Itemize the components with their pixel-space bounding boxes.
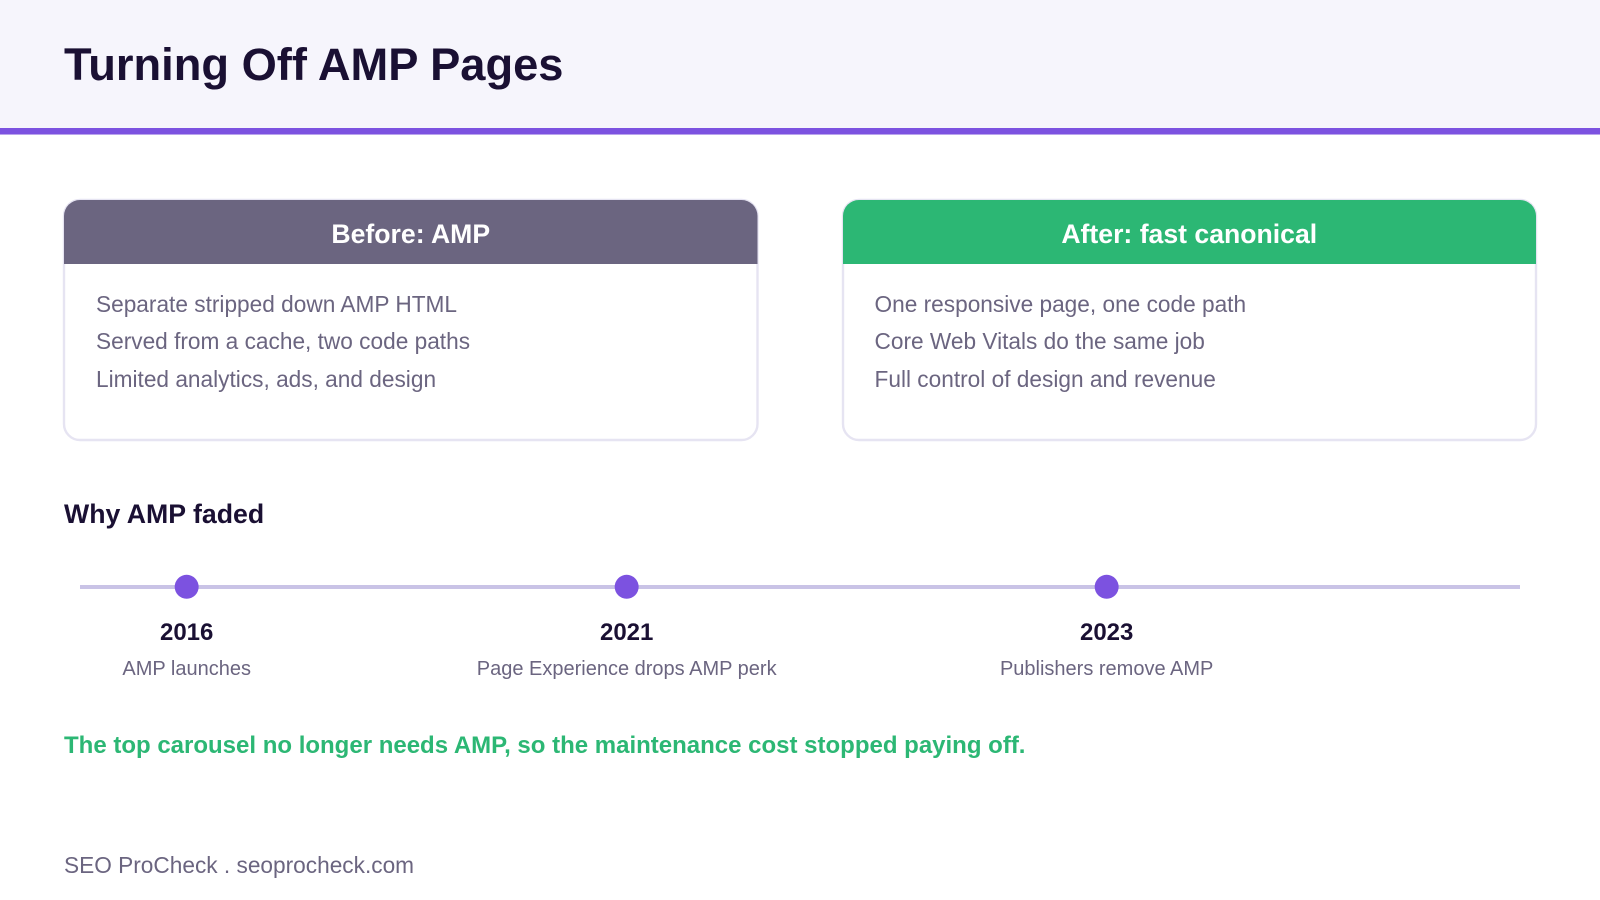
header band bbox=[0, 0, 1600, 135]
panel heading: before: Before: AMP bbox=[331, 219, 490, 249]
milestone: 2021: Page Experience drops AMP perk bbox=[477, 658, 777, 680]
section heading: Why AMP faded bbox=[64, 499, 264, 529]
list: after points: Core Web Vitals do the same job bbox=[874, 328, 1205, 354]
list: after points: Full control of design and revenue bbox=[874, 366, 1216, 392]
timeline bbox=[80, 574, 1520, 680]
list: after points bbox=[874, 291, 1246, 392]
milestone: 2016: 2016 bbox=[160, 619, 213, 646]
list: after points: One responsive page, one code path bbox=[874, 291, 1246, 317]
list: before points: Served from a cache, two code paths bbox=[96, 328, 470, 354]
list: before points bbox=[96, 291, 470, 392]
footer: SEO ProCheck . seoprocheck.com bbox=[64, 852, 414, 878]
list: before points: Separate stripped down AMP HTML bbox=[96, 291, 457, 317]
title: Turning Off AMP Pages bbox=[64, 39, 563, 90]
milestone: 2021: 2021 bbox=[600, 619, 653, 646]
panel: after fast canonical bbox=[842, 198, 1538, 442]
milestone: 2023: Publishers remove AMP bbox=[1000, 658, 1213, 680]
list: before points: Limited analytics, ads, and design bbox=[96, 366, 436, 392]
milestone: 2023 bbox=[1000, 574, 1213, 680]
milestone: 2016: AMP launches bbox=[122, 658, 251, 680]
milestone: 2016 bbox=[122, 574, 251, 680]
takeaway: The top carousel no longer needs AMP, so the maintenance cost stopped paying off. bbox=[64, 732, 1025, 759]
milestone: 2023: 2023 bbox=[1080, 619, 1133, 646]
panel heading: after: After: fast canonical bbox=[1061, 219, 1317, 249]
panel: before AMP bbox=[62, 198, 759, 442]
milestone: 2021 bbox=[477, 574, 777, 680]
